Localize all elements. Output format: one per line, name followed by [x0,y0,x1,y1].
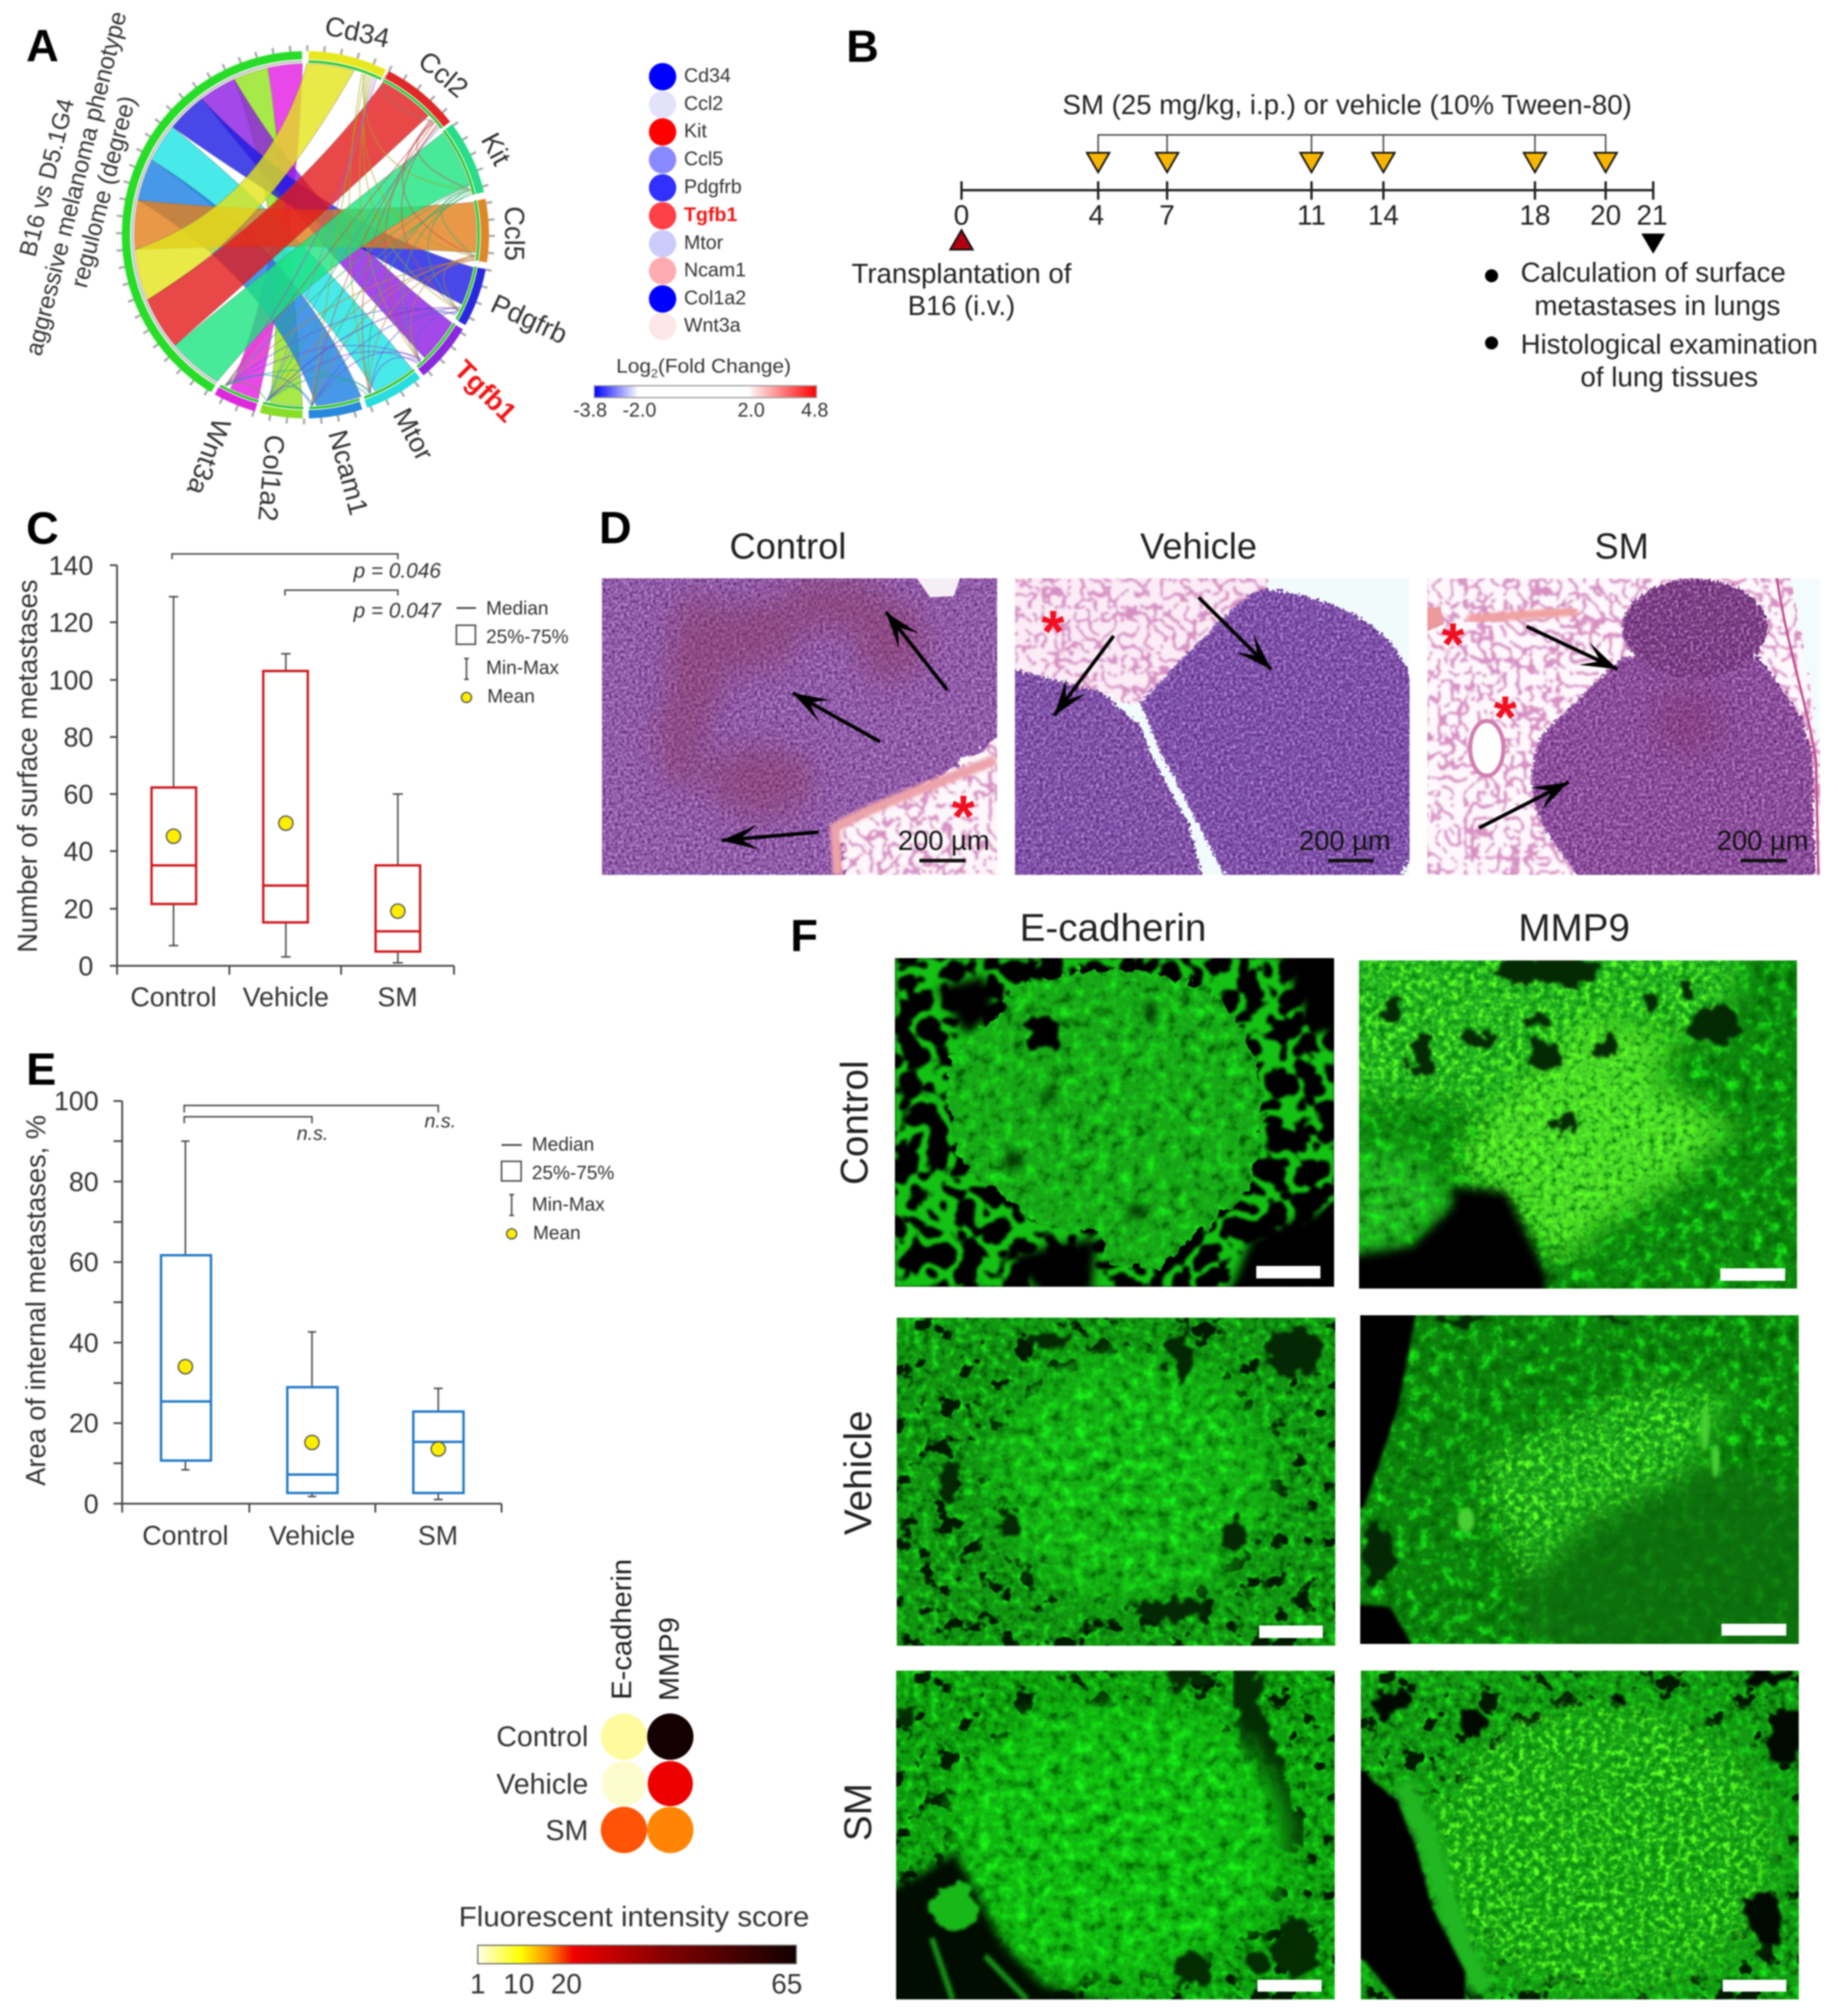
gene bubble labels: Tgfb1 [684,203,737,225]
histology image: Control [601,577,998,876]
gene labels: Mtor [387,403,440,465]
transplantation text: Transplantation of [852,258,1071,289]
tick marks around the ring [119,48,492,421]
gene labels: Pdgfrb [486,288,572,350]
row titles: Vehicle [836,1410,879,1535]
gene bubble labels: Cd34 [684,64,731,86]
p values: p = 0.047 [353,599,442,622]
histology image: Vehicle: * [1042,598,1065,665]
ribbon Ncam1 [138,160,361,405]
gene bubble labels: Ccl5 [684,147,723,169]
dosing triangles [1087,153,1617,172]
colorbar values: 10 [503,1968,534,1999]
fluorescence image: E-cadherin SM [895,1670,1336,2001]
x axis labels: SM [377,982,418,1012]
endpoint text [1521,257,1818,392]
significance brackets [172,554,398,596]
ribbon Kit [175,133,469,382]
colorbar title: (Fold Change) [658,355,791,377]
panel letter F: F [790,911,818,961]
legend: 25%-75% [486,626,569,647]
y axis title: Area of internal metastases, % [20,1115,51,1486]
n.s. labels [297,1110,456,1144]
colorbar title: Log [616,355,649,377]
panel E: internal metastases box plot [20,1044,614,1551]
column titles: MMP9 [1518,906,1630,949]
boxes [161,1255,464,1493]
colorbar values [470,1968,802,1999]
histology image: Vehicle [1014,577,1411,876]
ribbon Tgfb1 [201,79,452,358]
gene labels: Ncam1 [322,427,374,518]
ribbon Ccl2 [147,82,428,345]
panel D: histology [582,503,1820,892]
heatmap circles [601,1713,693,1853]
endpoint bullets [1485,269,1498,349]
gene labels: Col1a2 [253,434,291,522]
day labels: 20 [1590,199,1621,231]
y axis values: 100 [54,1086,99,1116]
legend: log2 fold change bubbles [573,63,828,421]
row titles: Control [833,1060,876,1185]
panel letter C: C [26,503,59,554]
y axis values: 60 [64,779,93,809]
colorbar values: 4.8 [801,399,828,421]
legend [456,597,569,707]
day labels: 14 [1368,199,1399,231]
mean markers [166,816,405,918]
dosing caption: SM (25 mg/kg, i.p.) or vehicle (10% Tween-80) [1063,89,1632,120]
legend: Mean [533,1222,581,1243]
histology image: SM: * [1494,684,1517,751]
n.s. labels: n.s. [297,1122,329,1144]
gene bubble labels: Kit [684,119,707,141]
panel A: chord diagram [14,8,572,522]
whiskers [169,597,403,963]
endpoint text: metastases in lungs [1534,290,1780,321]
colorbar values: 65 [771,1968,802,1999]
y axis values: 80 [69,1167,99,1197]
row headers: Vehicle [496,1769,588,1800]
y axis values: 0 [84,1489,99,1519]
legend: Mean [487,685,535,707]
outer ring sectors [126,55,485,414]
ribbon Cd34 [135,64,354,300]
gene bubble labels: Wnt3a [684,314,741,336]
day labels: 4 [1089,199,1104,231]
colorbar title: Fluorescent intensity score [459,1901,809,1932]
ribbon Ccl5 [134,200,477,253]
gene bubble labels: Pdgfrb [684,175,742,197]
axes [110,565,454,975]
colorbar values: -2.0 [623,399,656,421]
ribbon Col1a2 [234,68,302,406]
y axis values: 60 [69,1247,99,1277]
gene bubble labels: Col1a2 [684,286,746,308]
y axis values: 100 [49,665,93,695]
day labels: 18 [1519,199,1550,231]
y axis values: 0 [78,951,93,981]
transplantation text: B16 (i.v.) [908,290,1015,321]
legend [502,1133,614,1243]
panel: fluorescent intensity heatmap [459,1559,809,1999]
colorbar [478,1945,796,1964]
row headers [496,1721,588,1847]
endpoint text: of lung tissues [1581,361,1758,392]
gene labels: Wnt3a [181,414,237,499]
colorbar values: 20 [551,1968,582,1999]
left axis caption: B16 vs D5.1G4 [14,96,80,259]
ribbon Mtor [152,127,412,391]
fluorescence image: MMP9 Vehicle [1359,1314,1800,1645]
row titles: SM [836,1783,879,1841]
column headers [606,1559,685,1701]
day labels: 0 [954,199,969,231]
column titles [1020,906,1630,949]
boxes [152,671,420,952]
gene bubble labels: Ncam1 [684,259,746,281]
x axis labels: SM [418,1520,458,1551]
column titles [730,526,1649,566]
y axis values: 20 [69,1408,99,1438]
y axis values [49,550,93,981]
p values [353,559,442,622]
fluorescence image: E-cadherin Control [894,957,1335,1288]
x axis labels: Vehicle [242,982,329,1012]
histology image: SM: * [1442,611,1465,678]
endpoint marker [1641,234,1665,254]
gene bubble labels [684,64,746,336]
row headers: SM [546,1815,588,1847]
row titles [833,1060,879,1841]
gene labels [181,10,572,522]
legend: Min-Max [486,657,559,678]
histology image: Control: 200 µm [898,825,989,856]
day labels: 7 [1159,199,1175,231]
gene bubbles [649,63,676,340]
gene labels: Ccl5 [499,206,530,261]
column titles: Vehicle [1140,526,1257,566]
dosing bracket [1098,135,1606,153]
timeline axis [961,181,1653,200]
y axis values: 40 [69,1328,99,1358]
left axis caption: regulome (degree) [65,93,141,290]
x axis labels [142,1520,458,1551]
ribbon Pdgfrb [172,99,474,304]
panel F: immunofluorescence [790,906,1838,2016]
colorbar values [573,399,828,421]
ribbons [134,64,477,406]
histology image: SM [1426,577,1821,876]
histology image: Vehicle: 200 µm [1299,825,1391,856]
colorbar values: -3.8 [573,399,607,421]
gene labels: Ccl2 [412,45,474,103]
significance brackets [184,1105,439,1123]
panel B: treatment timeline [846,21,1818,392]
histology image: SM: 200 µm [1717,825,1808,856]
gene bubble labels: Ccl2 [684,92,723,114]
axes [114,1101,502,1513]
row headers: Control [496,1721,588,1753]
y axis values: 20 [64,894,93,924]
colorbar title: 2 [651,367,658,380]
legend: Median [486,597,548,619]
gene labels: Cd34 [322,10,393,53]
day labels: 21 [1637,199,1667,231]
y axis values [54,1086,99,1519]
column titles: SM [1594,526,1649,566]
panel letter D: D [599,503,632,553]
x axis labels: Control [130,982,217,1012]
fluorescence image: E-cadherin Vehicle [896,1316,1336,1647]
colorbar [594,386,816,398]
transplantation marker [950,230,973,250]
x axis labels: Vehicle [269,1520,355,1551]
panel letter B: B [846,21,879,72]
mean markers [178,1360,446,1456]
n.s. labels: n.s. [424,1110,456,1132]
legend: 25%-75% [532,1162,614,1183]
day labels: 11 [1297,199,1326,231]
gene labels: Tgfb1 [449,354,523,428]
colorbar values: 2.0 [737,399,765,421]
y axis values: 140 [49,550,93,581]
panel letter E: E [26,1044,56,1095]
fluorescence image: MMP9 Control [1358,959,1798,1290]
left axis caption: aggressive melanoma phenotype [20,8,132,358]
colorbar values: 1 [470,1968,485,1999]
x axis labels: Control [142,1520,229,1551]
thin chords between genes [225,74,476,406]
endpoint text: Calculation of surface [1521,257,1786,288]
legend: Median [532,1133,594,1155]
endpoint text: Histological examination [1521,329,1818,360]
ribbon Wnt3a [231,64,302,399]
panel letter A: A [26,21,59,71]
y axis values: 40 [64,836,93,867]
gene labels: Kit [475,128,518,171]
column headers: E-cadherin [606,1559,637,1700]
transplantation text [852,258,1071,321]
column titles: Control [730,526,846,566]
column headers: MMP9 [653,1617,685,1701]
legend: Min-Max [532,1193,605,1215]
y axis values: 120 [49,607,93,638]
y axis values: 80 [64,722,93,752]
gene bubble labels: Mtor [684,231,723,253]
p values: p = 0.046 [353,559,441,582]
whiskers [181,1141,443,1500]
panel C: surface metastases box plot [12,503,569,1012]
day labels [954,199,1667,231]
column titles: E-cadherin [1020,906,1206,949]
y axis title: Number of surface metastases [12,579,43,953]
x axis labels [130,982,418,1012]
histology image: Control: * [952,783,975,850]
fluorescence image: MMP9 SM [1343,1653,1818,2016]
